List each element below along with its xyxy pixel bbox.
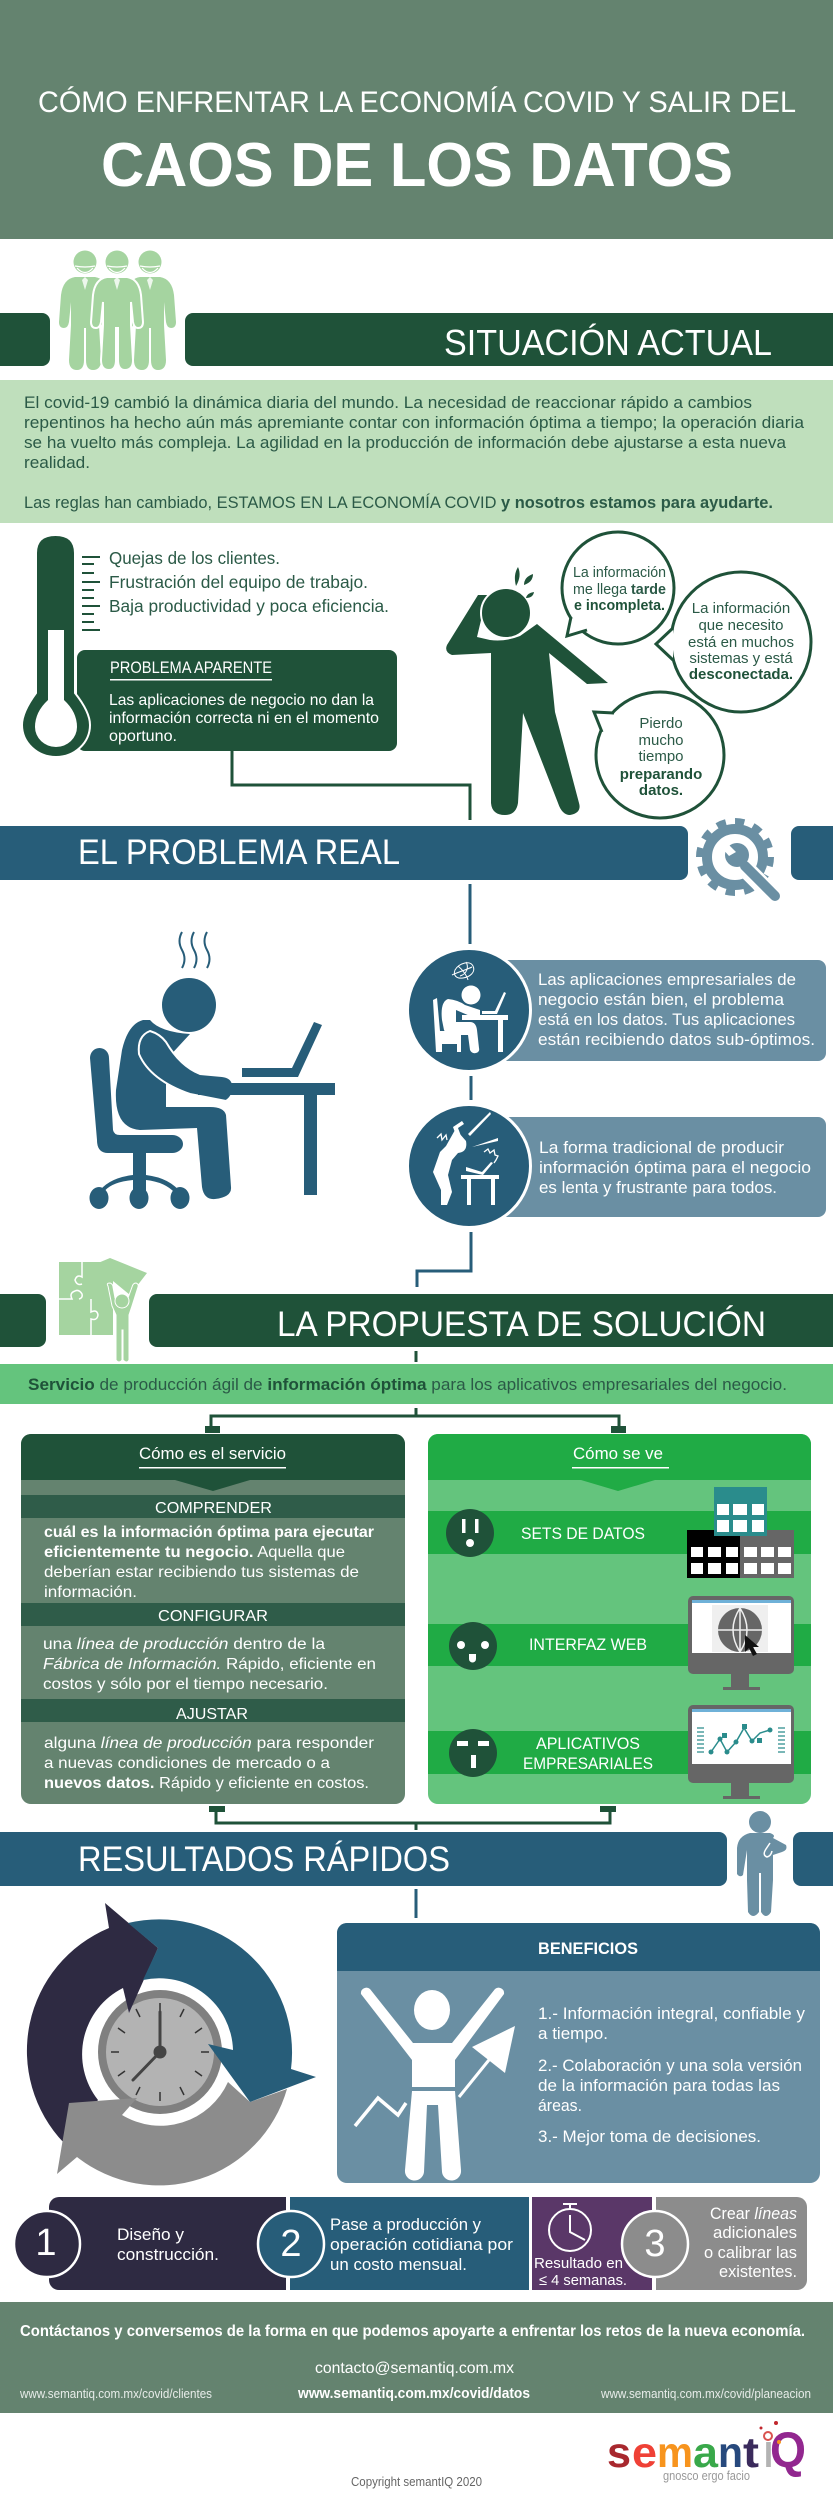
panel: aplicaciones: Las aplicaciones empresariales de	[538, 970, 796, 989]
speech bubble: desconectada: que necesito	[698, 617, 784, 634]
panel: cómo es el servicio	[21, 1434, 405, 1804]
step 3: existentes.	[719, 2262, 797, 2281]
speech bubble: tarde e incompleta	[562, 532, 674, 644]
solution statement band	[0, 1364, 833, 1404]
section: ajustar: nuevos datos. Rápido y eficiente en costos.	[44, 1775, 369, 1792]
panel header	[428, 1434, 811, 1491]
panel: intro text: realidad.	[24, 453, 90, 472]
result timing: Resultado en	[534, 2255, 623, 2272]
icon: clock	[98, 1990, 222, 2114]
panel: forma tradicional: La forma tradicional de producir	[539, 1138, 784, 1157]
main title: CAOS DE LOS DATOS	[101, 131, 733, 200]
solution statement band: Servicio de producción ágil de información óptima para los aplicativos empresariales del negocio.	[28, 1375, 787, 1394]
row: aplicativos empresariales	[428, 1729, 811, 1777]
icon: person confused at desk	[408, 948, 530, 1072]
logo: semantiQ	[607, 2421, 806, 2483]
logo: semantiQ: m	[657, 2429, 693, 2477]
section: ajustar	[21, 1699, 405, 1792]
step 2: Pase a producción y	[330, 2215, 481, 2234]
tagline: gnosco ergo facio	[663, 2468, 750, 2483]
panel: aplicaciones: está en los datos. Tus aplicaciones	[538, 1010, 795, 1029]
heading: LA PROPUESTA DE SOLUCIÓN	[277, 1305, 766, 1344]
speech bubble: desconectada: sistemas y está	[689, 650, 793, 667]
panel header	[21, 1434, 405, 1491]
section: configurar: Fábrica de Información. Rápido, eficiente en	[43, 1656, 376, 1673]
panel: intro text: se ha vuelto más compleja. La agilidad en la producción de información debe ajustarse a esta nueva	[24, 433, 787, 452]
callout: problema aparente	[77, 650, 397, 751]
connector: vertical line	[417, 884, 471, 1287]
arrow: blue	[128, 1919, 316, 2102]
benefits list: áreas.	[538, 2096, 582, 2115]
icon: web monitor	[688, 1596, 794, 1690]
banner: el problema real	[0, 826, 833, 880]
section: comprender: eficientemente tu negocio. Aquella que	[44, 1544, 345, 1561]
icon: person hitting laptop	[408, 1104, 530, 1228]
section: comprender	[21, 1495, 405, 1601]
connector: problem to person	[232, 751, 470, 820]
panel: aplicaciones: negocio están bien, el problema	[538, 990, 785, 1009]
connector: panels to results	[209, 1806, 616, 1830]
panel: cómo se ve	[428, 1434, 811, 1804]
step 3: o calibrar las	[704, 2243, 797, 2262]
symptom list	[109, 548, 389, 616]
panel: intro text	[0, 380, 833, 523]
footer panel: www.semantiq.com.mx/covid/planeacion	[600, 2386, 811, 2401]
callout: problema aparente: Las aplicaciones de negocio no dan la	[109, 692, 374, 709]
row: sets de datos	[428, 1509, 811, 1557]
section: comprender: cuál es la información óptima para ejecutar	[44, 1524, 374, 1541]
footer panel: contacto@semantiq.com.mx	[315, 2360, 514, 2377]
icon: three workers with masks	[59, 250, 176, 370]
speech bubble: preparando datos: Pierdo	[639, 715, 683, 732]
step 1: Diseño y	[117, 2225, 185, 2244]
symptom list: Frustración del equipo de trabajo.	[109, 572, 368, 592]
step strip	[14, 2197, 807, 2290]
row: interfaz web	[428, 1622, 811, 1670]
arrow: gray	[57, 2082, 287, 2185]
heading: EL PROBLEMA REAL	[78, 833, 400, 872]
row: sets de datos: SETS DE DATOS	[521, 1524, 645, 1543]
banner: la propuesta de solución	[0, 1294, 833, 1347]
logo: semantiQ: e	[632, 2429, 657, 2477]
callout: problema aparente: oportuno.	[109, 728, 177, 745]
benefits list: 2.- Colaboración y una sola versión	[538, 2056, 802, 2075]
speech bubble: desconectada: está en muchos	[688, 634, 794, 651]
footer panel: www.semantiq.com.mx/covid/datos	[297, 2385, 530, 2402]
title line: CÓMO ENFRENTAR LA ECONOMÍA COVID Y SALIR DEL	[38, 86, 796, 119]
body	[116, 1020, 231, 1199]
speech bubble: desconectada: La información	[692, 600, 790, 617]
connector: results line	[414, 1889, 418, 1918]
section: configurar: una línea de producción dentro de la	[43, 1636, 325, 1653]
speech bubble: preparando datos: tiempo	[638, 748, 684, 765]
panel: forma tradicional: es lenta y frustrante para todos.	[539, 1178, 777, 1197]
chair	[90, 1048, 183, 1197]
speech bubble: preparando datos	[594, 692, 724, 818]
section: ajustar: AJUSTAR	[176, 1706, 248, 1723]
benefits list: 3.- Mejor toma de decisiones.	[538, 2127, 761, 2146]
benefits list	[538, 2004, 805, 2146]
panel: aplicaciones	[490, 960, 826, 1061]
step 1: construcción.	[117, 2245, 219, 2264]
speech bubble: preparando datos: mucho	[638, 732, 684, 749]
panel: forma tradicional	[490, 1117, 826, 1217]
icon: data tables	[687, 1487, 794, 1578]
panel: intro text: El covid-19 cambió la dinámica diaria del mundo. La necesidad de reaccionar rápido a cambios	[24, 393, 752, 412]
panel: cómo es el servicio: Cómo es el servicio	[139, 1444, 286, 1463]
step 1: 1	[35, 2222, 57, 2264]
panel: intro text: repentinos ha hecho aún más apremiante contar con información óptima a tiempo; la operación diaria	[24, 413, 805, 432]
speech bubble: tarde e incompleta: e incompleta.	[574, 597, 665, 614]
footer panel: www.semantiq.com.mx/covid/clientes	[19, 2386, 212, 2401]
result timing: ≤ 4 semanas.	[539, 2272, 627, 2289]
header panel	[0, 0, 833, 239]
footer panel	[0, 2302, 833, 2413]
speech bubble: desconectada: desconectada.	[689, 666, 793, 683]
panel: forma tradicional: información óptima para el negocio	[539, 1158, 811, 1177]
logo: semantiQ: Q	[770, 2422, 806, 2478]
row: aplicativos empresariales: EMPRESARIALES	[523, 1754, 653, 1773]
steam	[180, 932, 210, 968]
panel header	[337, 1923, 820, 1971]
panel: beneficios: BENEFICIOS	[538, 1939, 638, 1958]
section: configurar: CONFIGURAR	[158, 1608, 268, 1625]
section: ajustar: alguna línea de producción para responder	[44, 1735, 375, 1752]
speech bubble: preparando datos: datos.	[639, 782, 683, 799]
icon: stressed person	[446, 567, 608, 815]
icon: standing person	[737, 1811, 786, 1916]
logo: semantiQ: n	[718, 2429, 743, 2477]
connector: banner to band	[414, 1351, 418, 1362]
callout: problema aparente: PROBLEMA APARENTE	[110, 658, 272, 677]
logo: semantiQ: s	[607, 2429, 631, 2477]
icon: gear and wrench	[700, 822, 775, 898]
panel: aplicaciones: están recibiendo datos sub-óptimos.	[538, 1030, 815, 1049]
arrow: dark purple	[27, 1903, 158, 2143]
step 3: Crear líneas	[710, 2204, 797, 2223]
desk	[198, 1083, 335, 1095]
row: interfaz web: INTERFAZ WEB	[529, 1635, 647, 1654]
heading: RESULTADOS RÁPIDOS	[78, 1840, 450, 1879]
logo: semantiQ: a	[693, 2429, 719, 2477]
icon: person frustrated at laptop	[90, 932, 335, 1209]
banner: situación actual	[0, 313, 833, 366]
row: aplicativos empresariales: APLICATIVOS	[536, 1734, 640, 1753]
step 2	[258, 2197, 529, 2290]
banner: resultados rápidos	[0, 1832, 833, 1886]
step 1	[14, 2197, 286, 2290]
speech bubble: tarde e incompleta: me llega tarde	[573, 581, 666, 598]
speech bubble: desconectada	[656, 572, 811, 712]
step 3: 3	[644, 2223, 666, 2265]
result timing	[532, 2197, 652, 2290]
icon: stopwatch	[549, 2204, 591, 2251]
copyright: Copyright semantIQ 2020	[351, 2474, 482, 2489]
panel: cómo se ve: Cómo se ve	[573, 1444, 663, 1463]
section: comprender: deberían estar recibiendo tus sistemas de	[44, 1564, 359, 1581]
benefits list: de la información para todas las	[538, 2076, 780, 2095]
panel: intro text: Las reglas han cambiado, ESTAMOS EN LA ECONOMÍA COVID y nosotros estamos para ayudarte.	[24, 493, 773, 512]
section: comprender: COMPRENDER	[155, 1500, 272, 1517]
step 3: adicionales	[713, 2223, 797, 2242]
cycle diagram with clock	[27, 1903, 316, 2185]
step 2: un costo mensual.	[330, 2255, 467, 2274]
heading: SITUACIÓN ACTUAL	[444, 322, 772, 363]
icon: dashboard monitor	[688, 1705, 794, 1799]
icon: thermometer	[22, 535, 100, 757]
section: configurar: costos y sólo por el tiempo necesario.	[43, 1676, 328, 1693]
section: ajustar: a nuevas condiciones de mercado o a	[44, 1755, 330, 1772]
panel: beneficios	[337, 1923, 820, 2183]
logo: semantiQ: I	[764, 2434, 773, 2475]
connector: band to two panels	[205, 1408, 626, 1433]
step 3	[622, 2197, 807, 2290]
icon: puzzle and person	[59, 1258, 147, 1362]
benefits list: a tiempo.	[538, 2024, 608, 2043]
speech bubble: tarde e incompleta: La información	[573, 564, 666, 581]
speech bubble: preparando datos: preparando	[620, 766, 702, 783]
step 2: operación cotidiana por	[330, 2235, 513, 2254]
step 2: 2	[280, 2223, 302, 2265]
benefits list: 1.- Información integral, confiable y	[538, 2004, 805, 2023]
section: comprender: información.	[44, 1584, 137, 1601]
icon: person celebrating with growth arrow	[355, 1988, 515, 2181]
symptom list: Baja productividad y poca eficiencia.	[109, 596, 389, 616]
logo: semantiQ: t	[743, 2429, 759, 2477]
callout: problema aparente: información correcta ni en el momento	[109, 710, 379, 727]
laptop	[242, 1022, 322, 1077]
symptom list: Quejas de los clientes.	[109, 548, 280, 568]
section: configurar	[21, 1603, 405, 1693]
